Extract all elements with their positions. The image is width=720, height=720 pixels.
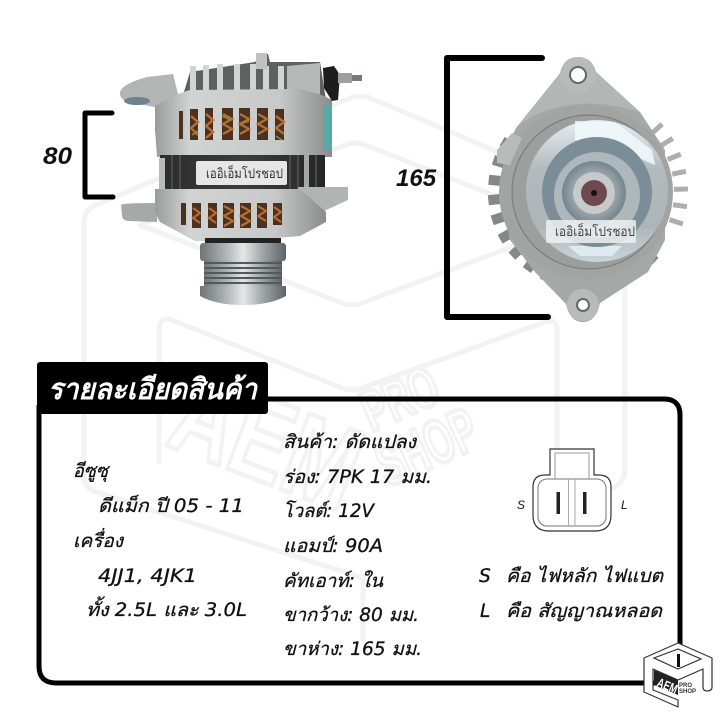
connector diagram: L [621,498,628,512]
icon: AEM Pro Shop logo: AEM [655,675,680,697]
upper housing [155,89,332,157]
legend: terminals: L [480,601,490,622]
pulley [200,238,286,305]
text block: specifications: แอมป์: 90A [283,535,383,557]
legend: terminals: คือ สัญญาณหลอด [506,601,663,622]
legend: terminals: คือ ไฟหลัก ไฟแบต [506,565,664,587]
alternator side view photo [120,53,362,305]
icon: AEM Pro Shop logo [644,643,712,707]
text block: specifications: ขาห่าง: 165 มม. [283,639,422,660]
header tab: รายละเอียดสินค้า [48,373,259,406]
dimension bracket: 165 [396,58,548,317]
housing with ears [500,57,665,322]
lower mounting ears [121,203,157,222]
watermark label [546,220,636,243]
rear cap with fins [183,53,326,107]
polished rotor disc [526,120,668,262]
lower housing [155,189,326,241]
icon: AEM Pro Shop logo: PRO [679,683,692,689]
panel border [39,399,680,683]
text block: vehicle fitment: เครื่อง [73,527,125,552]
disc highlights [575,121,655,165]
legend: terminals: S [479,566,491,587]
teal sticker [323,105,332,150]
text block: vehicle fitment: 4JJ1, 4JK1 [98,566,197,587]
text block: vehicle fitment: ดีแม็ก ปี 05 - 11 [98,494,244,517]
dimension bracket: 80 [43,113,113,197]
text block: vehicle fitment: ทั้ง 2.5L และ 3.0L [86,596,247,621]
output terminal [323,66,362,101]
icon: AEM Pro Shop logo: SHOP [679,689,696,695]
dimension label 165: 165 [396,165,437,192]
watermark label: เออิเอ็มโปรชอป [206,164,283,181]
upper windows with copper windings [179,108,284,140]
text block: specifications: โวลต์: 12V [283,500,375,522]
watermark: hexagon logo [84,96,625,640]
text block: specifications: ร่อง: 7PK 17 มม. [283,467,432,488]
connector diagram [517,449,628,531]
text block: specifications: สินค้า: ดัดแปลง [283,432,418,453]
watermark label: เออิเอ็มโปรชอป [555,222,635,239]
hub nut [573,172,615,214]
watermark label [196,161,287,185]
text block: vehicle fitment: อีซูซุ [73,461,110,482]
watermark: hexagon logo: PRO [351,353,448,443]
alternator front view photo [488,57,688,322]
lower windows with copper windings [181,203,282,228]
dimension label 80: 80 [43,143,73,170]
panel: product details [37,362,680,683]
top mounting ear [120,74,182,110]
header tab [37,362,268,414]
text block: vehicle fitment [73,461,247,621]
legend: terminals [479,565,664,622]
watermark: hexagon logo: SHOP [365,394,488,500]
top ear hole [560,57,596,93]
text block: specifications: ขากว้าง: 80 มม. [283,605,419,626]
connector diagram: S [517,498,525,512]
bottom ear hole [567,289,599,321]
watermark: hexagon logo: AEM [155,344,380,536]
text block: specifications: คัทเอาท์: ใน [283,570,384,592]
radial cooling fins [488,122,688,284]
side terminal block [497,133,522,165]
text block: specifications [283,432,432,660]
black stator [160,155,325,191]
